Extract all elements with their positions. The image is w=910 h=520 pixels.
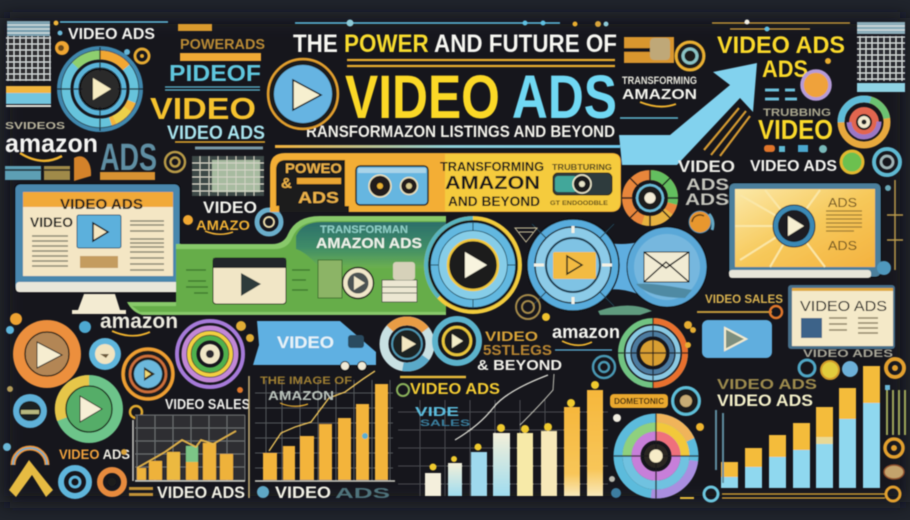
text: ads top: ADS <box>828 195 857 210</box>
icon: blue ring with video card <box>527 219 619 311</box>
label: amazon yellow: AMAZO <box>196 217 250 233</box>
arrow: rising growth arrow <box>619 63 757 165</box>
text: transforming amazon and beyond: AMAZON <box>445 173 540 193</box>
icon: orange ring blue play <box>123 349 173 399</box>
label: video strategies and beyond: 5STLEGS <box>483 342 552 359</box>
label: video ads white right: VIDEO ADS <box>750 158 837 175</box>
decor: chart baseline <box>722 494 885 498</box>
icon: slider device <box>553 173 612 195</box>
icons: right side column <box>884 385 905 479</box>
panel: top right device <box>624 37 704 70</box>
text: transforming amazon and beyond: AND BEYOND <box>448 193 540 209</box>
label: power ads: POWERADS <box>180 36 265 53</box>
badge: orange pill <box>610 394 668 408</box>
icon: speed lines <box>186 270 310 293</box>
label: video ads yellow top right: VIDEO ADS <box>717 32 845 59</box>
text: poweo and ads: ADS <box>298 190 339 207</box>
label: video ads orange: VIDEO ADS <box>59 446 130 462</box>
label: video strategies and beyond: VIDEO <box>485 328 538 344</box>
text: ads bottom: ADS <box>828 238 857 253</box>
icon: green play circle <box>55 375 123 443</box>
connector: blue ring bridge <box>585 232 665 300</box>
label: amazon yellow <box>183 215 250 234</box>
title line two: video ads: VIDEO ADS <box>345 63 617 131</box>
label: video bottom: VIDEO <box>275 483 331 502</box>
icon: green dot <box>841 151 863 173</box>
icon: main play button <box>268 59 338 129</box>
text: video on van: VIDEO <box>277 333 334 352</box>
text: video ads card: VIDEO ADS <box>800 298 887 315</box>
icon: segmented play ring centre <box>384 321 430 367</box>
label: small video text: SVIDEOS <box>5 121 65 132</box>
icon: top-left grid box <box>6 21 51 107</box>
top right rule <box>712 20 850 99</box>
label: transforming amazon <box>620 75 697 118</box>
logo text: amazon lower left: amazon <box>100 310 178 333</box>
label: video ads ads stack: VIDEO <box>678 157 735 176</box>
label: power ads <box>178 24 265 61</box>
icon: spiral target <box>593 356 615 378</box>
label: video sales: VIDEO SALES <box>165 396 250 413</box>
divider: chart rule <box>248 376 250 498</box>
icon: orange green wheel <box>622 170 678 226</box>
title rules <box>347 60 615 66</box>
text: copy lines <box>826 211 862 231</box>
icon: blue lens badge <box>13 394 47 428</box>
icon: top right grid box <box>857 22 905 92</box>
icon: blue ring with envelope <box>627 227 707 307</box>
icon: rainbow wheel <box>613 413 699 499</box>
icon: video player tile <box>213 258 286 304</box>
title line one: THE POWER AND FUTURE OF <box>293 30 617 58</box>
divider: pideof <box>165 87 260 90</box>
icon strip: under amazon <box>5 166 70 180</box>
chart: small bar chart <box>133 415 245 481</box>
text: poweo and ads <box>281 160 342 207</box>
icon: small target <box>257 210 281 234</box>
icon: small orange ring <box>689 211 713 233</box>
icon: blue delivery van with video label <box>253 321 376 370</box>
heading: video yellow: VIDEO <box>150 91 256 126</box>
label: ads yellow: ADS <box>762 56 808 83</box>
chart: amazon bar chart <box>255 371 395 481</box>
title line three: RANSFORMAZON LISTINGS AND BEYOND <box>306 122 615 141</box>
label: video ads cyan: VIDEO ADS <box>167 123 265 144</box>
label: video bottom <box>257 483 390 502</box>
text: transforming amazon ads: AMAZON ADS <box>316 235 422 252</box>
title underline <box>275 145 620 148</box>
panel: small video ads card <box>788 285 895 349</box>
label: video bottom: ADS <box>335 485 390 502</box>
text: amazon on chart: AMAZON <box>268 388 334 403</box>
icon: blue play tile <box>702 320 772 358</box>
icon: orange play circle <box>13 320 81 388</box>
label: faded ads <box>74 137 157 181</box>
logo text: amazon centre: amazon <box>552 322 620 342</box>
icon: blue target bottom <box>61 468 89 496</box>
icon: partial ring next to centre <box>435 319 479 363</box>
icon: blue target <box>874 149 900 175</box>
label: video ads ads stack: ADS <box>685 190 729 209</box>
icon: grid thumbnail <box>192 148 264 196</box>
icons: row of small discs <box>799 359 904 379</box>
icon: delivery play badge <box>318 260 374 298</box>
icon: purple target <box>177 321 243 387</box>
text: video on monitor: VIDEO <box>30 214 73 230</box>
dots row <box>764 145 827 153</box>
label: transforming amazon: AMAZON <box>622 86 697 103</box>
top rule with dots <box>295 20 608 27</box>
chart: right stacked bars <box>716 366 880 488</box>
label: video white: VIDEO <box>203 198 257 217</box>
label: video ades faded: VIDEO ADES <box>803 348 893 360</box>
panel: orange and yellow banner <box>270 153 621 212</box>
text: video cyan on chart: VIDE <box>415 404 459 419</box>
label: pideof: PIDEOF <box>169 60 261 86</box>
label: video ads ads stack: ADS <box>686 175 729 194</box>
text: video ads on monitor: VIDEO ADS <box>60 196 143 213</box>
text lines: monitor copy <box>32 221 164 270</box>
text: poweo and ads: POWEO <box>285 160 342 176</box>
icon: spiral <box>165 152 185 172</box>
icon: concentric orange green ring <box>618 318 688 388</box>
text: transforming amazon ads <box>316 224 422 252</box>
panel: right monitor <box>729 183 881 278</box>
label: video ads bright: VIDEO ADS <box>717 391 813 410</box>
icon: yellow chevrons with arch <box>9 448 53 497</box>
label: transforming amazon: TRANSFORMING <box>622 75 697 87</box>
decor: muddy shadow under rings <box>598 306 652 315</box>
icon: orange dot in purple ring <box>802 71 830 99</box>
text: transforming amazon ads: TRANSFORMAN <box>320 224 408 236</box>
icon: blue twin lens device <box>356 166 428 205</box>
icon: multi colour ring <box>841 99 887 145</box>
icons: scattered small dots <box>3 327 704 499</box>
panel: left monitor <box>15 184 180 314</box>
small dots around purple target <box>6 313 254 342</box>
decorative dots near top-left <box>54 20 168 63</box>
label: video sales yellow <box>684 292 783 329</box>
decor: right column <box>877 180 903 275</box>
icon: segmented play ring <box>57 47 143 131</box>
label: small panel text: GT ENDOODBLE <box>550 201 608 207</box>
label: video ads top-left: VIDEO ADS <box>68 26 155 43</box>
label: video strategies and beyond <box>477 328 562 374</box>
label: video ads ads stack <box>678 157 735 209</box>
label: video yellow right: VIDEO <box>758 114 833 145</box>
icon: monitor video tile <box>77 215 121 248</box>
text: faded sales: SALES <box>420 418 470 428</box>
icon: device stack <box>382 262 417 302</box>
icon: swirl over ring <box>516 295 550 321</box>
divider <box>175 141 265 143</box>
label: trubbing: TRUBBING <box>763 107 831 119</box>
text: transforming amazon and beyond <box>440 159 544 209</box>
label: video ads faded yellow: VIDEO ADS <box>717 376 817 393</box>
label: trubturing: TRUBTURING <box>552 162 612 172</box>
text: video ads on chart: VIDEO ADS <box>410 381 500 398</box>
label: faded ads: ADS <box>100 137 157 179</box>
thumbnail: monitor <box>80 256 118 268</box>
text: faded heading: THE IMAGE OF <box>260 375 352 387</box>
icon: baseline ring <box>704 487 900 501</box>
text: poweo and ads: & <box>281 175 292 192</box>
icon: large yellow blue play ring <box>425 217 521 313</box>
label: video sales yellow: VIDEO SALES <box>705 292 783 306</box>
icon: blue badge with cream centre <box>89 338 121 370</box>
chart: mixed colour bar chart <box>397 374 608 496</box>
text: transforming amazon and beyond: TRANSFORMING <box>440 159 544 174</box>
label: video ads bottom: VIDEO ADS <box>157 483 245 502</box>
thumbnail row <box>801 318 878 338</box>
badge: orange pill: DOMETONIC <box>614 396 664 406</box>
icon: blue ring badge <box>672 388 700 414</box>
decor: funnel <box>515 228 537 242</box>
logo text: amazon left: amazon <box>5 128 98 158</box>
panel: green banner <box>127 216 446 315</box>
icon: monitor play <box>773 205 815 247</box>
icon: yellow ring small <box>130 406 142 418</box>
icon: orange target bottom <box>100 470 124 494</box>
label: video strategies and beyond: & BEYOND <box>477 357 562 374</box>
